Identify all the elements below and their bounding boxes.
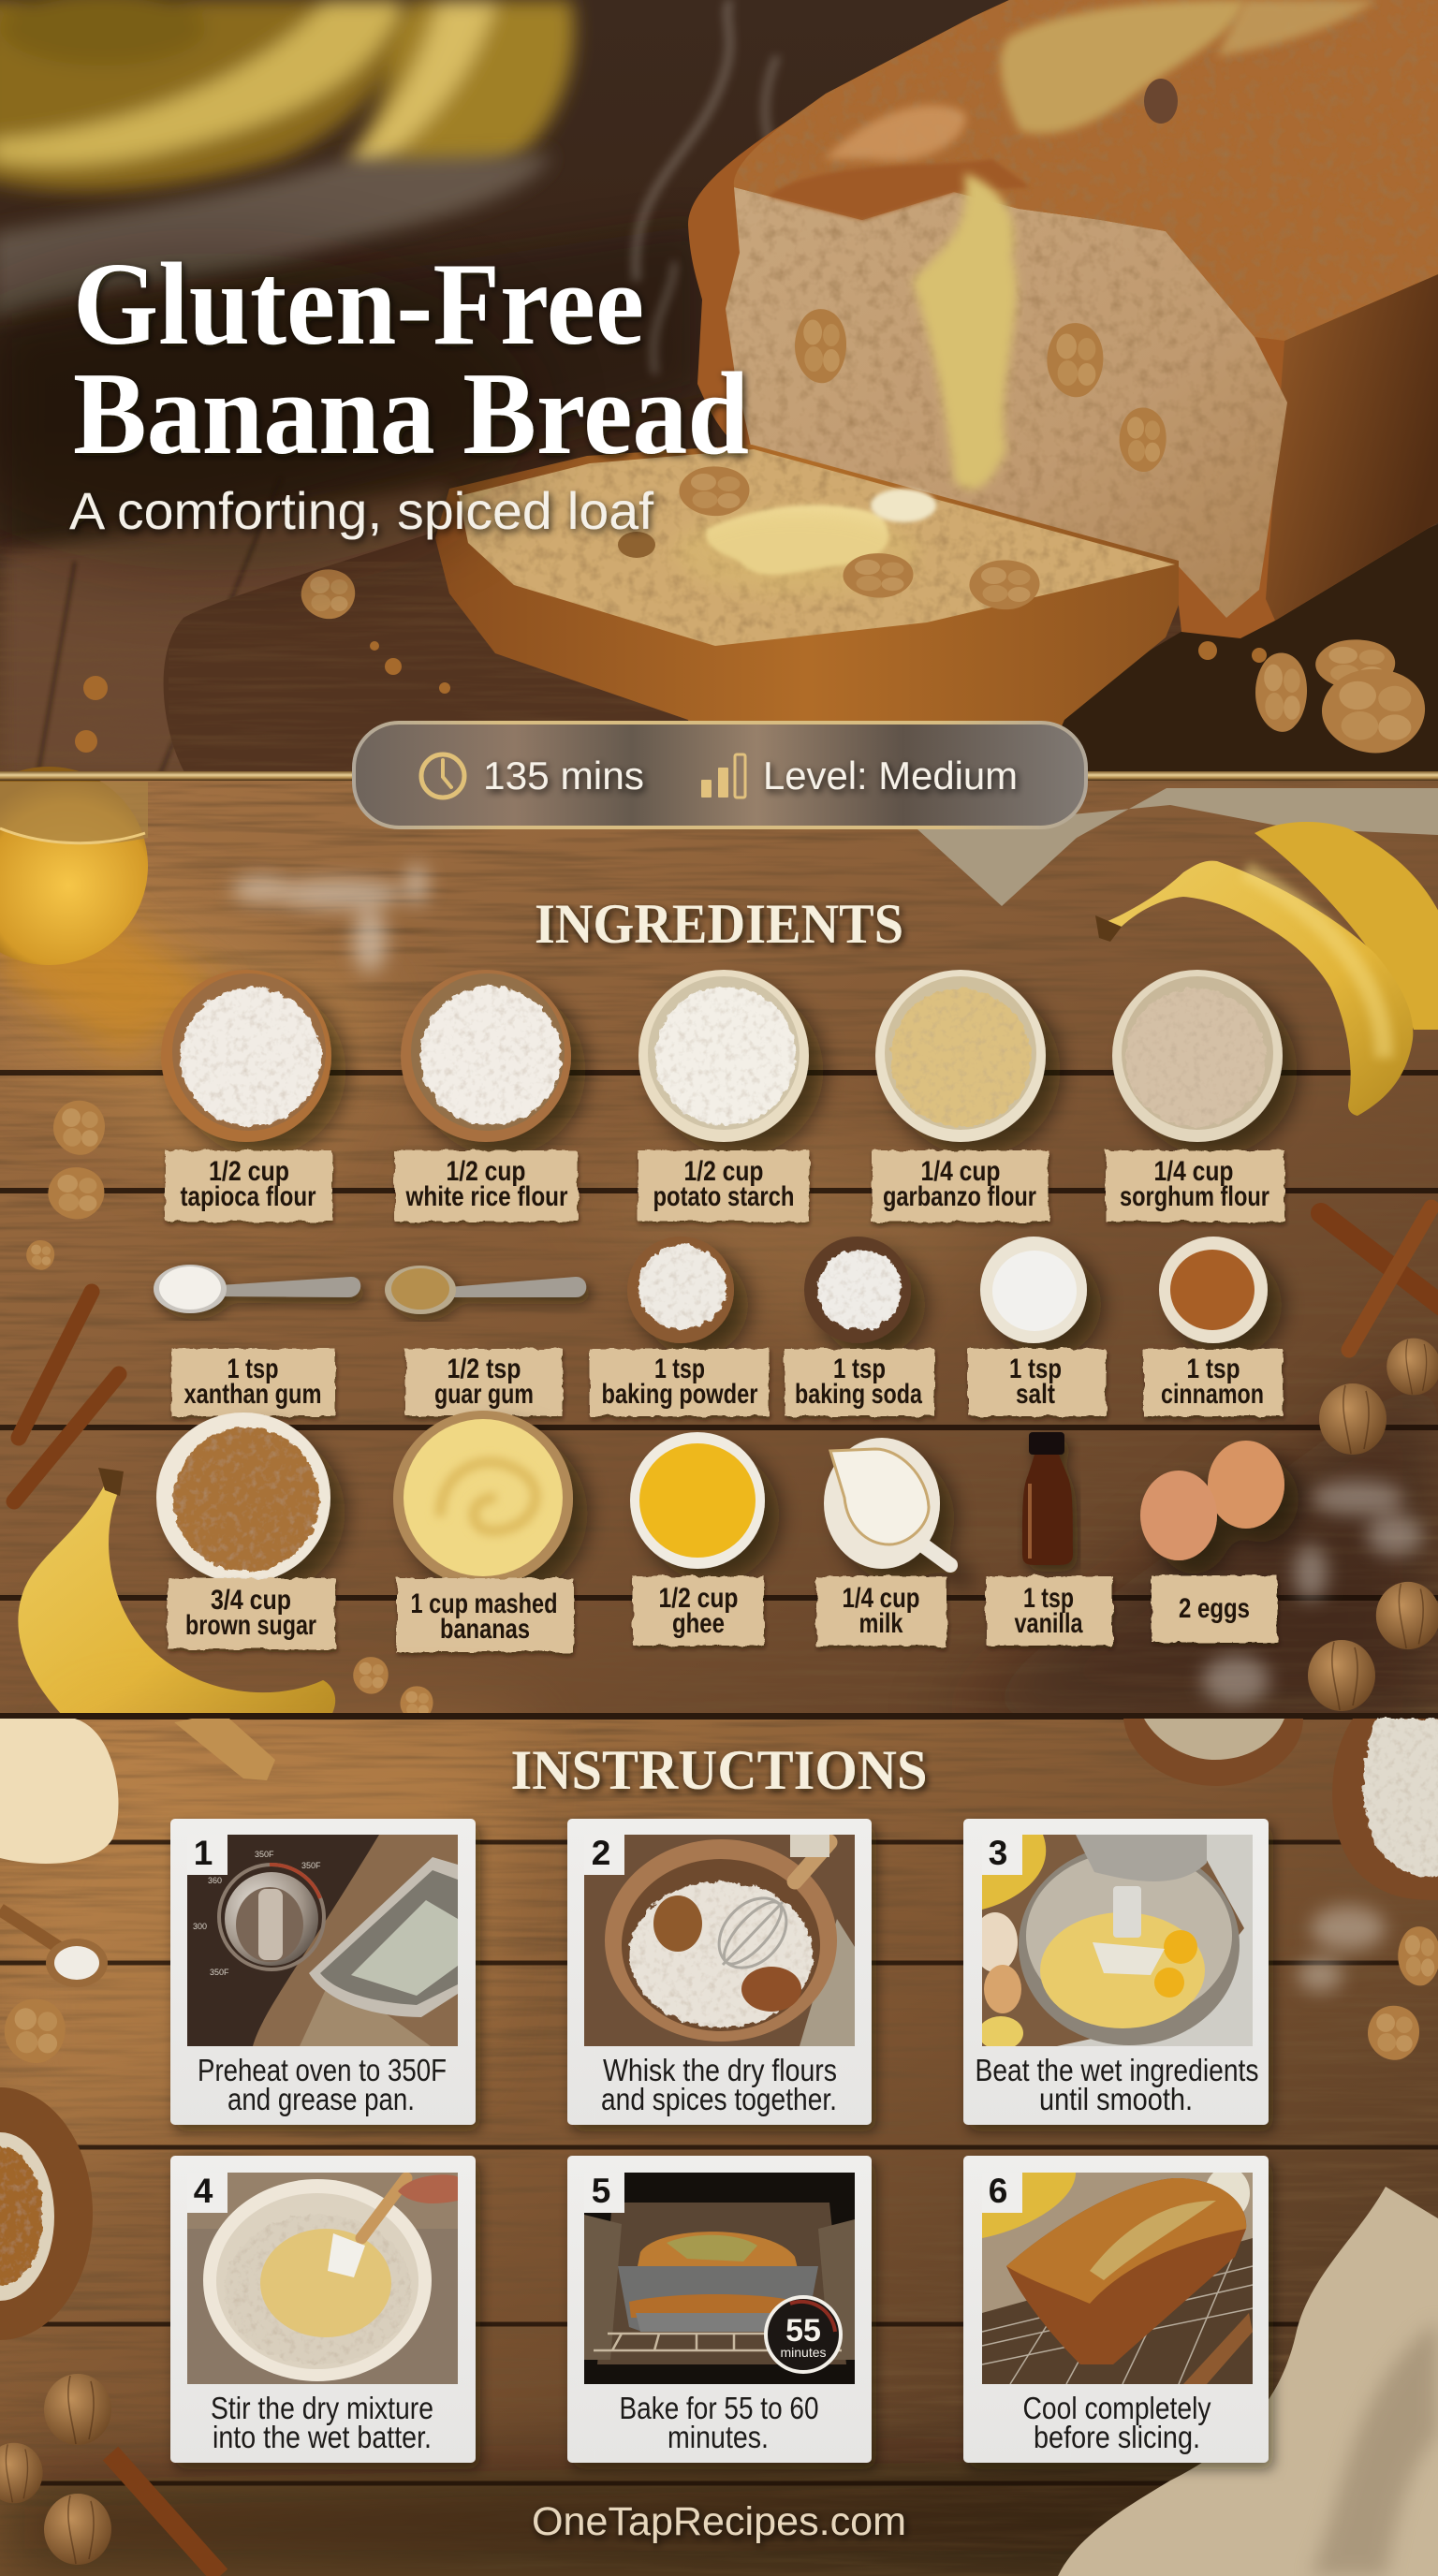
label: milk: milk bbox=[859, 1608, 903, 1639]
melted butter drip bbox=[913, 173, 1017, 490]
label: xanthan gum bbox=[171, 1349, 335, 1416]
step 5 image bbox=[584, 2173, 855, 2384]
dark table band bbox=[0, 225, 702, 580]
step 1 image bbox=[187, 1835, 458, 2046]
walnuts in crumb bbox=[795, 309, 846, 383]
icon: level bars bbox=[701, 754, 745, 798]
label: cinnamon bbox=[1144, 1349, 1283, 1416]
step 1 image: 350F bbox=[210, 1968, 229, 1977]
panel: hero photo bbox=[0, 0, 1438, 777]
jar of honey bbox=[0, 767, 225, 1058]
step 3 number tab bbox=[982, 1834, 1022, 1875]
step 5 caption bbox=[620, 2391, 818, 2454]
label: vanilla bbox=[986, 1576, 1112, 1646]
butter pat bbox=[706, 505, 888, 575]
step 5 number tab: 5 bbox=[592, 2172, 610, 2210]
step card 2 bbox=[567, 1819, 872, 2125]
step 1 number tab bbox=[187, 1834, 227, 1875]
label: mashed bananas: bananas bbox=[440, 1614, 530, 1645]
lower-left planks bbox=[0, 487, 449, 777]
bowl: mashed bananas bbox=[393, 1411, 573, 1587]
step 6 number tab: 6 bbox=[989, 2172, 1007, 2210]
label: salt: salt bbox=[1016, 1379, 1055, 1410]
bowl left bbox=[0, 2087, 93, 2340]
pitcher: milk bbox=[824, 1438, 950, 1569]
label: xanthan gum: 1 tsp bbox=[227, 1354, 279, 1384]
step 1 image: 300 bbox=[193, 1922, 207, 1931]
step 1 image: 360 bbox=[208, 1876, 222, 1885]
step 1 image: 350F bbox=[301, 1861, 321, 1870]
walnut cluster bbox=[1255, 639, 1425, 753]
title: Gluten-Free bbox=[73, 240, 644, 370]
step card 4 bbox=[170, 2156, 476, 2463]
step 2 caption: and spices together. bbox=[601, 2082, 837, 2116]
label: sorghum flour bbox=[1106, 1150, 1284, 1222]
eggs bbox=[1140, 1441, 1284, 1560]
label: garbanzo flour: 1/4 cup bbox=[921, 1156, 1000, 1187]
step card 1 bbox=[170, 1819, 476, 2125]
step 6 number tab bbox=[982, 2172, 1022, 2213]
bowl: ghee bbox=[630, 1432, 765, 1569]
bowl: garbanzo flour bbox=[875, 970, 1046, 1142]
step card 5 bbox=[567, 2156, 872, 2463]
step 1 caption: Preheat oven to 350F bbox=[198, 2053, 447, 2087]
hero cloth bbox=[0, 154, 552, 323]
slice of bread bbox=[435, 445, 1179, 777]
label: baking powder: baking powder bbox=[601, 1379, 758, 1410]
label: ghee: ghee bbox=[672, 1608, 725, 1639]
subtitle: A comforting, spiced loaf bbox=[69, 481, 653, 540]
step 3 caption: until smooth. bbox=[1039, 2082, 1193, 2116]
steam wisps bbox=[636, 0, 796, 374]
step 1 image: 350F bbox=[255, 1850, 274, 1859]
step 1 caption: and grease pan. bbox=[227, 2082, 415, 2116]
plank seams bbox=[0, 1073, 1438, 1598]
label: brown sugar bbox=[168, 1578, 335, 1649]
step 4 caption bbox=[211, 2391, 433, 2454]
whole walnuts bbox=[0, 2374, 111, 2565]
label: cinnamon: cinnamon bbox=[1161, 1379, 1264, 1410]
step 6 caption: Cool completely bbox=[1022, 2391, 1211, 2425]
cutting board bbox=[164, 524, 1438, 777]
label: salt: 1 tsp bbox=[1009, 1354, 1062, 1384]
bowl: potato starch bbox=[638, 970, 809, 1142]
step 4 caption: into the wet batter. bbox=[213, 2420, 432, 2454]
heading: instructions: INSTRUCTIONS bbox=[511, 1739, 927, 1801]
label: vanilla: 1 tsp bbox=[1023, 1583, 1074, 1614]
step 2 caption bbox=[601, 2053, 837, 2116]
cinnamon sticks left bbox=[14, 1292, 119, 1501]
label: guar gum bbox=[405, 1349, 563, 1416]
heading: ingredients: INGREDIENTS bbox=[535, 893, 903, 955]
spoon: guar gum bbox=[385, 1266, 586, 1314]
label: mashed bananas bbox=[397, 1578, 574, 1652]
label: xanthan gum: xanthan gum bbox=[183, 1379, 322, 1410]
flour dust right bbox=[1298, 1906, 1386, 1992]
rolling pin bbox=[174, 1719, 275, 1780]
label: brown sugar: brown sugar bbox=[185, 1610, 316, 1641]
label: salt bbox=[968, 1349, 1106, 1416]
title: Banana Bread bbox=[73, 349, 749, 479]
loaf side bbox=[1266, 274, 1438, 621]
whole walnuts right bbox=[1308, 1339, 1438, 1711]
label: white rice flour bbox=[394, 1150, 578, 1222]
step 2 number tab bbox=[584, 1834, 624, 1875]
label: vanilla: vanilla bbox=[1015, 1608, 1083, 1639]
walnut pieces bottom bbox=[353, 1657, 433, 1720]
cinnamon sticks right bbox=[1321, 1208, 1438, 1350]
step 3 image bbox=[982, 1835, 1253, 2046]
wooden spoon with salt bbox=[0, 1910, 108, 1987]
bowl: brown sugar bbox=[156, 1412, 330, 1583]
step 1 number tab: 1 bbox=[194, 1834, 213, 1872]
loaf cut face bbox=[726, 187, 1287, 618]
label: garbanzo flour: garbanzo flour bbox=[883, 1181, 1036, 1212]
step 5 number tab bbox=[584, 2172, 624, 2213]
step 6 caption bbox=[1022, 2391, 1211, 2454]
bowl: baking soda bbox=[804, 1237, 911, 1343]
label: brown sugar: 3/4 cup bbox=[211, 1585, 291, 1616]
plank seams bbox=[0, 1842, 1438, 2483]
label: cinnamon: 1 tsp bbox=[1187, 1354, 1240, 1384]
step 5 caption: minutes. bbox=[668, 2420, 769, 2454]
label: milk bbox=[816, 1576, 946, 1646]
bowl top right 2 bbox=[1332, 1719, 1438, 1900]
bowl: cinnamon bbox=[1159, 1237, 1268, 1343]
label: sorghum flour: 1/4 cup bbox=[1153, 1156, 1234, 1187]
loaf bbox=[688, 0, 1438, 638]
step 4 number tab: 4 bbox=[194, 2172, 213, 2210]
blurred bananas bbox=[0, 0, 574, 191]
bowl: sorghum flour bbox=[1112, 970, 1283, 1142]
step 4 caption: Stir the dry mixture bbox=[211, 2391, 433, 2425]
label: white rice flour: white rice flour bbox=[405, 1181, 568, 1212]
sunlight bbox=[0, 1722, 524, 2153]
label: guar gum: 1/2 tsp bbox=[448, 1354, 521, 1384]
label: potato starch bbox=[638, 1150, 810, 1222]
bowl: white rice flour bbox=[401, 970, 571, 1142]
label: baking soda: 1 tsp bbox=[833, 1354, 886, 1384]
title shade bbox=[0, 253, 534, 571]
bowl top right 1 bbox=[1123, 1719, 1303, 1786]
panel: ingredients board bbox=[0, 767, 1438, 1722]
label: guar gum: guar gum bbox=[434, 1379, 534, 1410]
crumbs bbox=[75, 641, 1267, 753]
label: mashed bananas: 1 cup mashed bbox=[410, 1588, 558, 1619]
panel: instructions board bbox=[0, 1713, 1438, 2576]
label: tapioca flour bbox=[165, 1150, 332, 1222]
step 4 image bbox=[187, 2173, 458, 2384]
label: eggs: 2 eggs bbox=[1179, 1593, 1250, 1624]
label: sorghum flour: sorghum flour bbox=[1120, 1181, 1269, 1212]
step 3 caption: Beat the wet ingredients bbox=[976, 2053, 1258, 2087]
walnuts mid bbox=[5, 1926, 1438, 2063]
time text: 135 mins bbox=[483, 754, 644, 798]
linen cloth bbox=[1058, 2187, 1438, 2576]
step card 3 bbox=[963, 1819, 1269, 2125]
label: milk: 1/4 cup bbox=[843, 1583, 919, 1614]
label: baking soda bbox=[785, 1349, 934, 1416]
bottle: vanilla bbox=[1022, 1432, 1073, 1565]
milk jug top-left bbox=[0, 1719, 119, 1864]
step 1 caption bbox=[198, 2053, 447, 2116]
step 2 caption: Whisk the dry flours bbox=[603, 2053, 837, 2087]
loaf top crust bbox=[734, 0, 1438, 341]
step 3 caption bbox=[976, 2053, 1258, 2116]
status pill bbox=[354, 723, 1086, 827]
label: ghee bbox=[633, 1576, 764, 1646]
bowl: tapioca flour bbox=[161, 970, 331, 1142]
panel: time and level bar bbox=[0, 723, 1438, 827]
step 5 caption: Bake for 55 to 60 bbox=[620, 2391, 818, 2425]
flour dust top bbox=[232, 864, 428, 973]
banana right bbox=[1095, 861, 1413, 1116]
title bbox=[73, 240, 749, 479]
step card 6 bbox=[963, 2156, 1269, 2463]
step 2 image bbox=[584, 1835, 855, 2046]
label: baking soda: baking soda bbox=[795, 1379, 922, 1410]
cinnamon stick bbox=[110, 2453, 220, 2576]
label: baking powder: 1 tsp bbox=[654, 1354, 705, 1384]
bowl: salt bbox=[980, 1237, 1087, 1343]
banana back bbox=[1255, 822, 1438, 1030]
sunlight patches bbox=[0, 824, 393, 1217]
label: baking powder bbox=[590, 1349, 769, 1416]
label: eggs bbox=[1152, 1575, 1277, 1643]
label: potato starch: 1/2 cup bbox=[683, 1156, 764, 1187]
walnut piece on board bbox=[301, 569, 355, 619]
title block bbox=[69, 240, 749, 540]
icon: clock bbox=[421, 754, 464, 798]
step 2 number tab: 2 bbox=[592, 1834, 610, 1872]
step 6 image bbox=[982, 2173, 1253, 2384]
bowl: baking powder bbox=[627, 1237, 734, 1343]
label: potato starch: potato starch bbox=[653, 1181, 794, 1212]
timer badge: 55 bbox=[785, 2313, 821, 2349]
step 4 number tab bbox=[187, 2172, 227, 2213]
step 6 caption: before slicing. bbox=[1034, 2420, 1200, 2454]
banana bottom-left bbox=[18, 1468, 335, 1719]
footer site name: OneTapRecipes.com bbox=[532, 2499, 906, 2544]
label: tapioca flour: 1/2 cup bbox=[209, 1156, 289, 1187]
flour dust right bbox=[1202, 1481, 1423, 1705]
timer badge bbox=[766, 2297, 841, 2372]
level text: Level: Medium bbox=[763, 754, 1018, 798]
step 3 number tab: 3 bbox=[989, 1834, 1007, 1872]
label: white rice flour: 1/2 cup bbox=[446, 1156, 526, 1187]
walnuts left bbox=[26, 1101, 105, 1270]
timer badge: minutes bbox=[780, 2345, 827, 2360]
label: tapioca flour: tapioca flour bbox=[180, 1181, 316, 1212]
label: garbanzo flour bbox=[872, 1150, 1049, 1222]
label: ghee: 1/2 cup bbox=[659, 1583, 738, 1614]
cloth top right bbox=[917, 788, 1438, 906]
spoon: xanthan gum bbox=[154, 1265, 360, 1313]
